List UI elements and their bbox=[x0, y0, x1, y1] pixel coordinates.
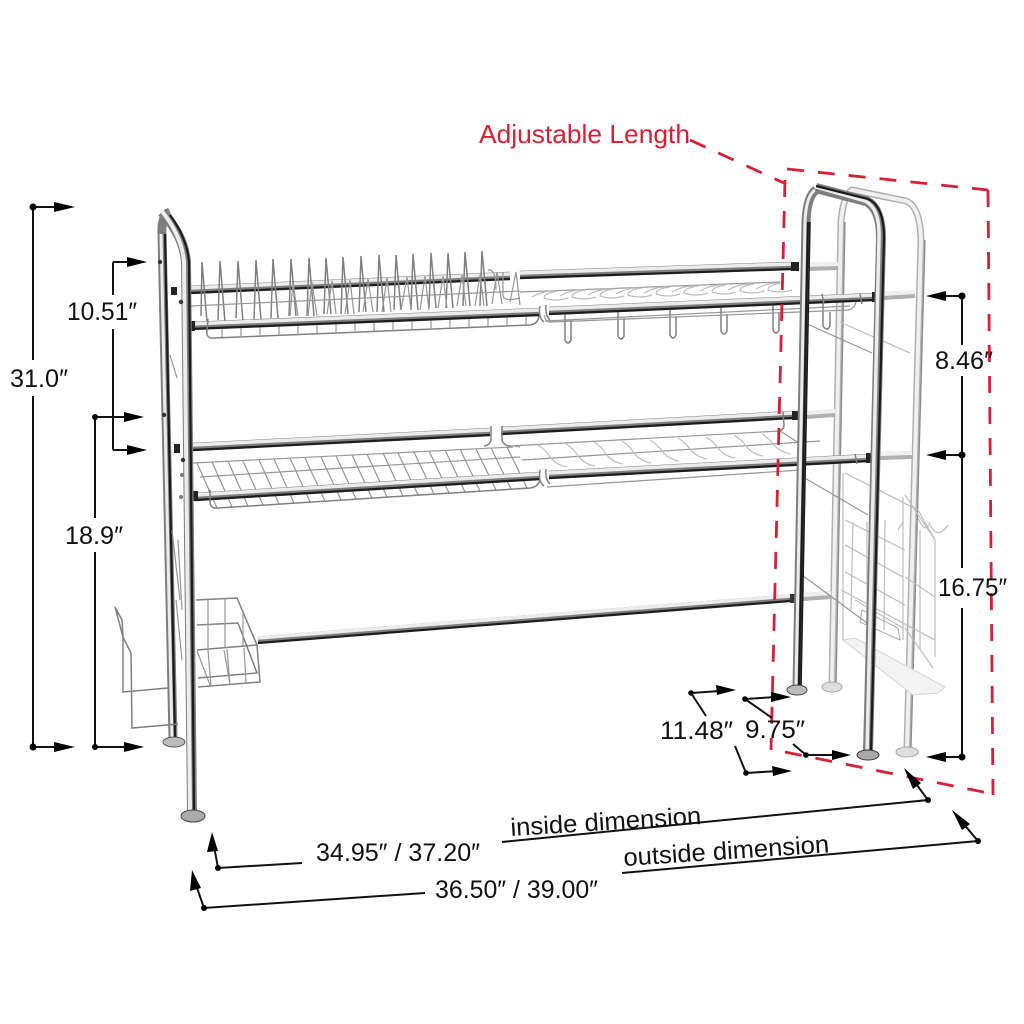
dimension: inside width: 34.95″ / 37.20″ bbox=[316, 839, 480, 867]
plate rack tines bbox=[190, 251, 520, 322]
right side thin cross wires bbox=[802, 322, 910, 623]
foot: rear light front bbox=[896, 747, 918, 757]
right front post and arch bbox=[816, 186, 884, 752]
bottom bar bbox=[258, 594, 797, 643]
upper left mesh shelf bbox=[206, 311, 539, 338]
foot: rear light back bbox=[822, 682, 842, 692]
dimension: 9.75 inches bbox=[742, 692, 851, 760]
adjustable length dashed outline bbox=[690, 140, 993, 795]
right back post bbox=[796, 190, 816, 686]
dimension: 10.51 inches bbox=[67, 257, 147, 455]
side holder wire bbox=[115, 607, 178, 728]
adjustable length label: Adjustable Length bbox=[479, 119, 690, 149]
upper front bar bbox=[190, 292, 878, 331]
lower right scalloped shelf bbox=[510, 431, 820, 487]
dimension: 18.9 inches: 18.9″ bbox=[65, 522, 123, 550]
dimension: 31.0 inches bbox=[10, 202, 75, 752]
dish rack illustration bbox=[115, 186, 948, 822]
foot: right front bbox=[857, 750, 879, 760]
dimension: 10.51 inches: 10.51″ bbox=[67, 298, 137, 326]
dimension: 11.48 inches bbox=[660, 685, 792, 776]
dimension: outside width bbox=[190, 810, 981, 911]
feet bbox=[163, 682, 918, 822]
upper back bar bbox=[171, 262, 799, 295]
dimension: 18.9 inches bbox=[65, 412, 144, 752]
lower back bar bbox=[174, 411, 799, 453]
rear light posts and arch bbox=[832, 190, 925, 748]
left back post bbox=[161, 212, 182, 738]
dimension: inside width bbox=[207, 768, 931, 871]
outside dimension label: outside dimension bbox=[623, 830, 830, 872]
right side bar extensions bbox=[803, 264, 915, 597]
dimension: 8.46 inches: 8.46″ bbox=[935, 347, 993, 375]
inside dimension label: inside dimension bbox=[510, 802, 702, 842]
dimension: 9.75 inches: 9.75″ bbox=[745, 716, 805, 744]
foot: left front bbox=[181, 810, 205, 822]
upper right scalloped shelf with hooks bbox=[520, 282, 856, 343]
foot: right back bbox=[787, 685, 807, 695]
dimension: 8.46 inches bbox=[926, 291, 993, 455]
lower left mesh shelf bbox=[193, 447, 540, 508]
dimension: 16.75 inches: 16.75″ bbox=[938, 574, 1007, 602]
left front post and arch bbox=[158, 210, 194, 812]
foot: left back bbox=[163, 737, 185, 747]
dimension: outside width: 36.50″ / 39.00″ bbox=[435, 876, 598, 904]
dimension: 11.48 inches: 11.48″ bbox=[660, 717, 733, 745]
lower front bar bbox=[192, 453, 872, 502]
dimension: 16.75 inches bbox=[926, 450, 1007, 762]
dimension: 31.0 inches: 31.0″ bbox=[10, 365, 68, 393]
right holder basket and tray bbox=[841, 473, 948, 695]
side basket bbox=[196, 598, 260, 687]
